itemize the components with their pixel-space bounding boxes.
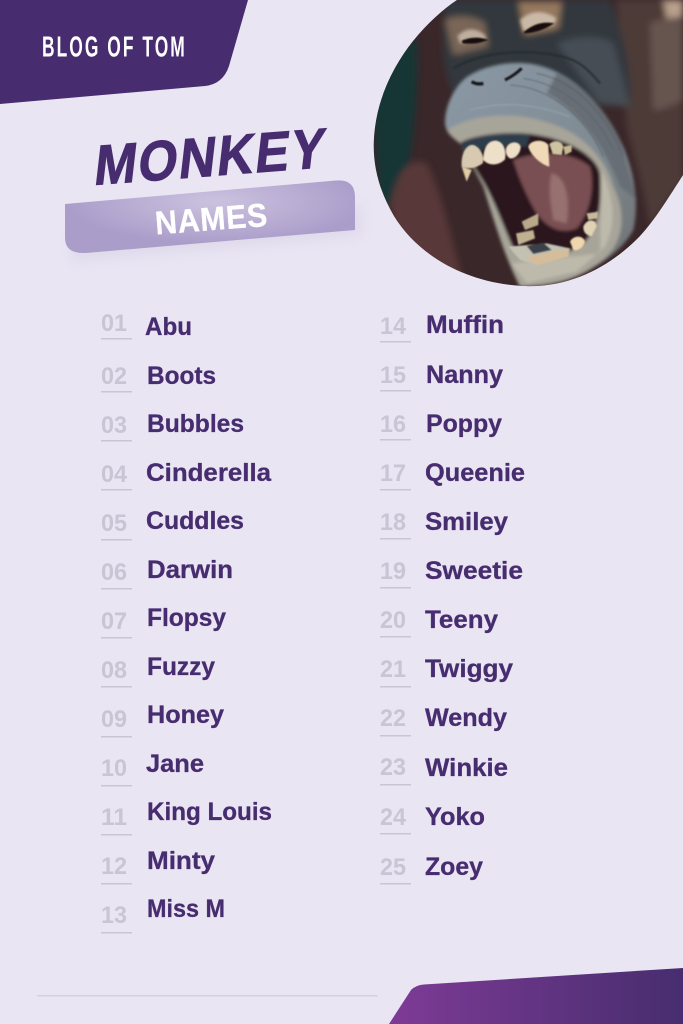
entry 07 [101,604,226,638]
entry 10 [101,750,204,786]
entry 14: Muffin [426,311,504,339]
entry 20 [380,606,498,638]
entry 18 [380,508,508,540]
entry 02: 02 [101,363,127,390]
entry 25: Zoey [425,853,483,881]
entry 22: 22 [380,705,406,732]
names list: column one [101,310,272,934]
entry 23: Winkie [425,754,508,782]
entry 09: Honey [147,701,224,729]
entry 24 [380,803,485,834]
title word: monkey: MONKEY [92,117,329,198]
entry 05: Cuddles [146,507,244,535]
entry 12 [101,847,215,884]
entry 18: Smiley [425,508,508,536]
entry 23: 23 [380,754,406,781]
header banner [0,0,248,104]
entry 11 [101,798,272,836]
entry 12: 12 [101,853,127,880]
entry 02 [101,362,216,392]
entry 11: King Louis [147,798,272,826]
brand text: BLOG OF TOM [42,31,185,64]
entry 19 [380,557,523,588]
entry 09: 09 [101,706,127,733]
entry 21 [380,655,513,688]
entry 16: Poppy [426,410,502,438]
entry 15 [380,361,503,392]
teeth [462,141,598,265]
entry 06: 06 [101,559,127,586]
footer banner [389,968,683,1024]
entry 10: 10 [101,755,127,782]
entry 16: 16 [380,411,406,438]
entry 15: 15 [380,362,406,389]
entry 13 [101,895,225,934]
entry 01: 01 [101,310,127,337]
entry 24: Yoko [425,803,485,831]
entry 03: 03 [101,412,127,439]
entry 06 [101,556,233,590]
entry 11: 11 [101,804,127,831]
photo: laughing orangutan [370,0,683,295]
entry 08: Fuzzy [147,653,215,681]
entry 07: 07 [101,608,127,635]
entry 20: Teeny [425,606,498,634]
entry 20: 20 [380,607,406,634]
subtitle word: names: NAMES [154,196,268,242]
entry 16 [380,410,502,440]
entry 17 [380,459,525,490]
entry 05: 05 [101,510,127,537]
entry 17: 17 [380,460,406,487]
entry 22 [380,704,507,736]
entry 19: 19 [380,558,406,585]
entry 13: 13 [101,902,127,929]
entry 22: Wendy [425,704,507,732]
names list: column two [380,311,525,884]
entry 25: 25 [380,854,406,881]
entry 03: Bubbles [147,410,244,438]
entry 06: Darwin [147,556,233,584]
entry 04 [101,459,272,490]
entry 04: 04 [101,461,128,488]
entry 23 [380,754,508,786]
entry 05 [101,507,244,540]
entry 07: Flopsy [147,604,226,632]
entry 14 [380,311,504,342]
entry 25 [380,853,483,884]
title [65,117,362,262]
entry 09 [101,701,224,738]
entry 02: Boots [147,362,216,390]
entry 01 [101,310,192,341]
entry 17: Queenie [425,459,525,487]
entry 18: 18 [380,509,406,536]
entry 21: Twiggy [425,655,513,683]
entry 03 [101,410,244,442]
entry 08 [101,653,215,688]
entry 24: 24 [380,804,407,831]
entry 14: 14 [380,313,407,340]
entry 01: Abu [145,313,192,341]
entry 19: Sweetie [425,557,523,585]
entry 10: Jane [146,750,204,778]
entry 13: Miss M [147,895,225,923]
subtitle banner [65,180,362,262]
entry 08: 08 [101,657,127,684]
entry 04: Cinderella [146,459,272,487]
facial detail [454,22,604,156]
entry 12: Minty [147,847,215,875]
entry 21: 21 [380,656,406,683]
entry 15: Nanny [426,361,503,389]
